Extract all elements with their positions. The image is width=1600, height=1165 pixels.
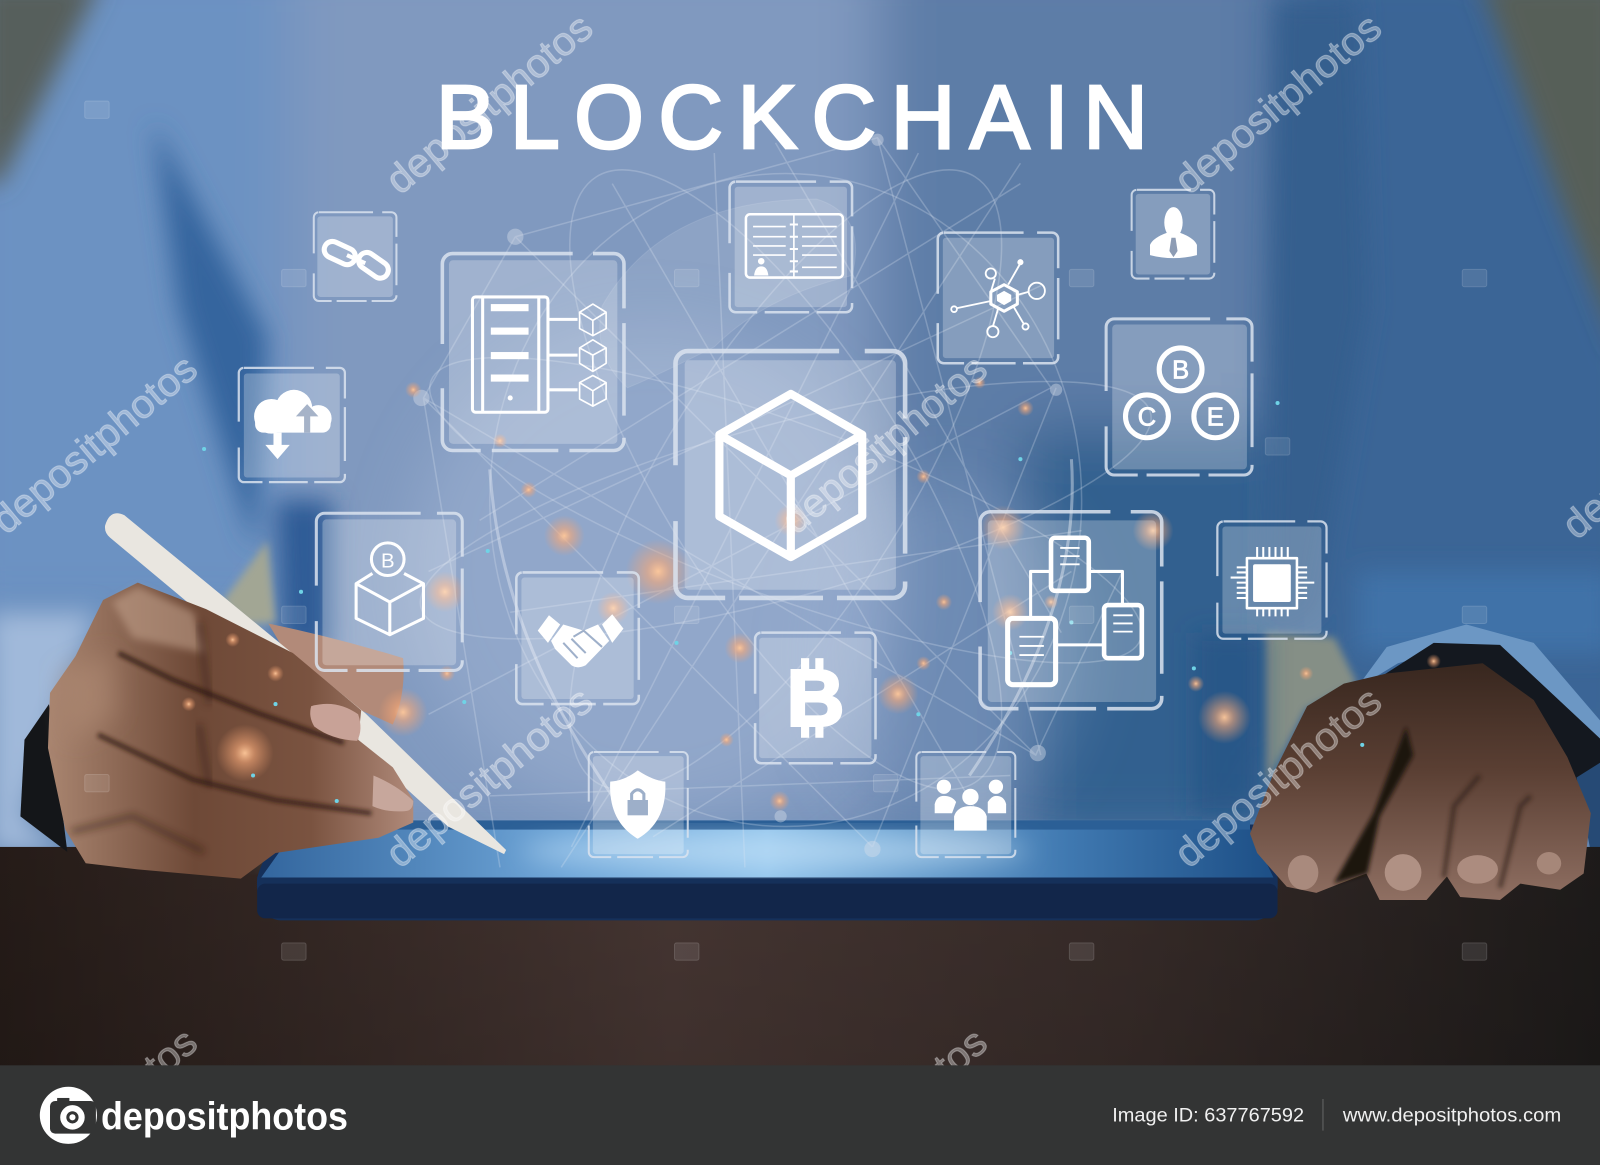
title: BLOCKCHAIN (436, 68, 1148, 168)
icon: chain link (322, 239, 392, 281)
icon: server with blocks (472, 297, 606, 412)
watermarks: depositphotos (1166, 5, 1390, 203)
card: bitcoin (755, 633, 876, 763)
logo wordmark: depositphotos (101, 1096, 348, 1139)
globe and network lines (399, 112, 1173, 867)
card: bitcoin box: B (381, 550, 395, 572)
left sleeve cuff (0, 612, 97, 852)
logo: depositphotos camera mark (40, 1087, 97, 1144)
card: team of people (916, 752, 1015, 857)
watermarks: depositphotos (378, 679, 601, 876)
stylus pen (105, 513, 506, 854)
icon: team (935, 780, 1006, 831)
card: B C E coins: C (1138, 404, 1156, 432)
watermarks: depositphotos (773, 346, 996, 543)
card: ledger book (730, 182, 852, 312)
gap behind left arm (222, 541, 276, 624)
gap behind right arm (1265, 633, 1357, 786)
icon: handshake (538, 614, 623, 667)
card: chain link (314, 212, 396, 301)
card: molecule network (938, 233, 1058, 363)
icon: linked documents (1008, 538, 1142, 685)
right sleeve cuff (1356, 624, 1600, 776)
footer bar (0, 1065, 1600, 1165)
card: document flow (980, 512, 1162, 709)
card: B C E coins (1106, 319, 1252, 475)
card: microchip (1217, 521, 1327, 639)
watermark camera marks (85, 101, 1487, 960)
icon: cube (719, 394, 862, 557)
icon: shield with padlock (610, 770, 665, 839)
icon: microchip (1231, 547, 1314, 616)
image id: Image ID: 637767592 (1112, 1104, 1304, 1126)
tablet (257, 820, 1278, 920)
orange glowing particles (182, 377, 1441, 811)
card: bitcoin box (316, 513, 462, 670)
icon: cloud with arrows (254, 390, 332, 459)
left hand (20, 583, 413, 879)
card: central block (676, 351, 905, 598)
watermarks: depositphotos (378, 5, 601, 203)
hidden thumb behind stylus (268, 623, 404, 724)
card: security shield (589, 752, 688, 857)
card: B C E coins: B (1172, 357, 1189, 385)
icon: open ledger (746, 214, 843, 278)
icon: box with coin (356, 543, 423, 635)
card: B C E coins: E (1207, 404, 1224, 432)
right hand (1250, 663, 1591, 900)
card: cloud upload and download (239, 368, 345, 482)
website url: www.depositphotos.com (1342, 1104, 1561, 1126)
card: businessman (1132, 190, 1214, 279)
card: server connected to blocks (442, 254, 624, 451)
icon: businessman (1150, 207, 1197, 258)
icon: molecule network (951, 263, 1045, 337)
watermarks: depositphotos (1166, 679, 1390, 876)
icon: bitcoin symbol: B (787, 654, 844, 743)
icon: three coins (1126, 348, 1237, 438)
card: handshake (516, 572, 639, 704)
